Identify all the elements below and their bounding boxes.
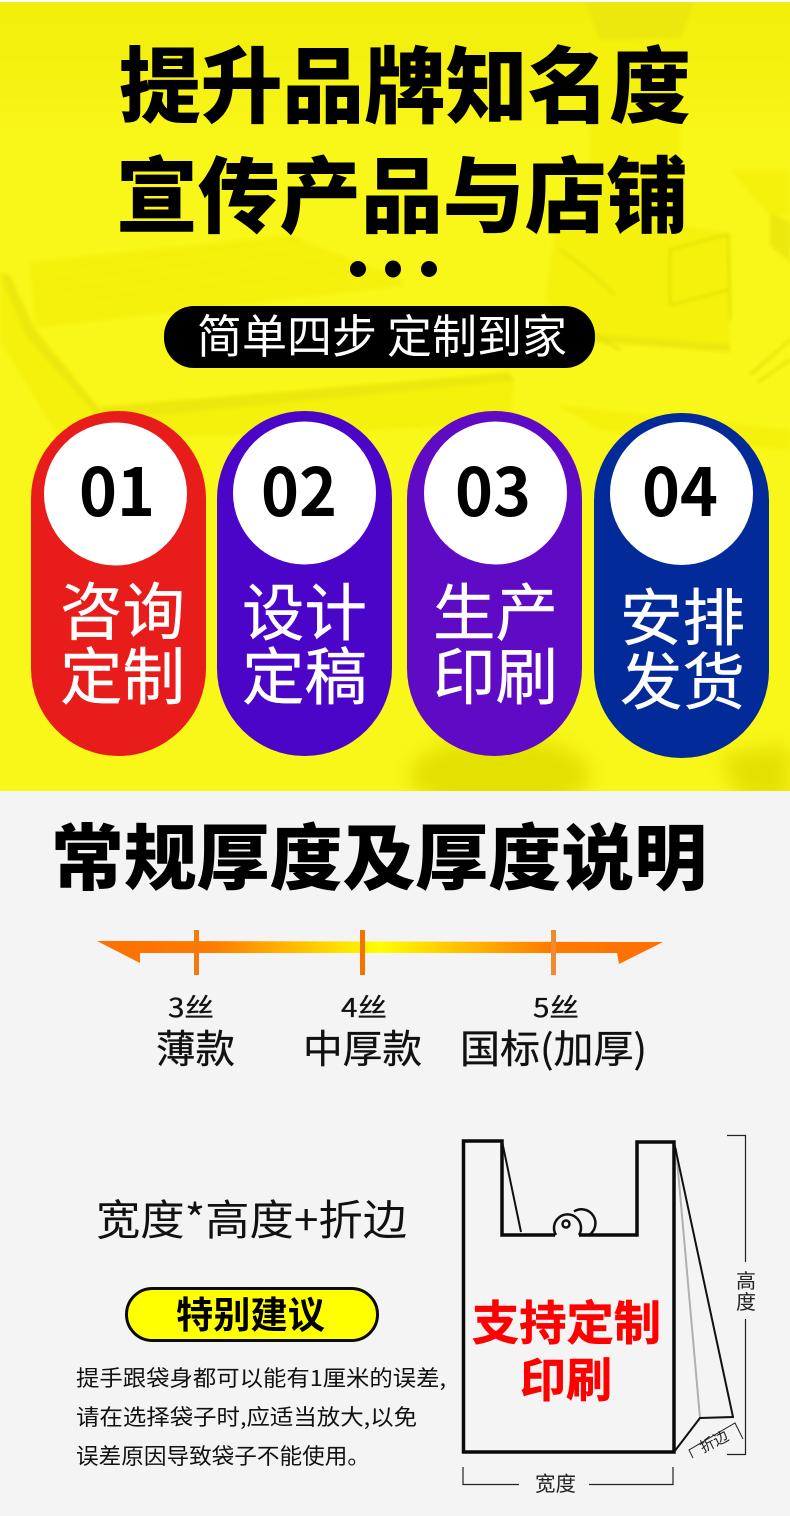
bag hole <box>554 1209 595 1235</box>
step 04 capsule <box>594 413 769 758</box>
thickness label: 5 si national standard: 5丝 <box>533 988 579 1025</box>
title: main heading <box>116 20 691 250</box>
fold label: 折边 <box>696 1425 732 1457</box>
panel: yellow hero background <box>0 0 790 813</box>
fold bracket <box>689 1423 743 1458</box>
bag print label: 印刷 <box>520 1342 612 1411</box>
thickness label: 4 si medium: 4丝 <box>341 988 387 1025</box>
title: main heading: 宣传产品与店铺 <box>116 130 688 250</box>
advice paragraph: 误差原因导致袋子不能使用。 <box>76 1439 370 1471</box>
width bracket <box>463 1467 673 1484</box>
diagram: t-shirt bag <box>463 1136 746 1484</box>
step 03 capsule: 生产 <box>433 563 558 653</box>
step 01 capsule: 咨询 <box>60 562 185 652</box>
bag print label: 支持定制 <box>472 1285 661 1354</box>
side fold <box>674 1142 733 1452</box>
size formula text: 宽度*高度+折边 <box>96 1187 407 1248</box>
thickness label: 3 si thin <box>156 988 235 1075</box>
decorative three dots <box>350 260 437 278</box>
advice paragraph: 提手跟袋身都可以能有1厘米的误差, <box>76 1361 446 1393</box>
thickness label: 5 si national standard <box>460 988 647 1075</box>
height bracket <box>727 1136 746 1454</box>
width label: 宽度 <box>535 1467 576 1497</box>
step 04 capsule: 发货 <box>620 632 745 722</box>
step 01 capsule <box>31 411 206 756</box>
step 03 capsule: 03 <box>455 440 531 536</box>
bag print label <box>472 1285 661 1411</box>
step 04 capsule: 04 <box>642 440 718 536</box>
thickness gradient scale <box>97 930 663 975</box>
thickness label: 3 si thin: 薄款 <box>156 1019 235 1075</box>
step 03 capsule: 印刷 <box>433 627 558 717</box>
title: main heading: 提升品牌知名度 <box>119 20 691 140</box>
handle gusset line <box>502 1141 521 1232</box>
subtitle pill: 简单四步 定制到家 <box>197 301 567 367</box>
height label <box>736 1265 756 1315</box>
bag outline <box>464 1141 674 1452</box>
callout: special advice pill: 特别建议 <box>176 1285 325 1339</box>
step 03 capsule <box>407 411 582 756</box>
advice paragraph: 请在选择袋子时,应适当放大,以免 <box>76 1400 417 1432</box>
step 01 capsule: 01 <box>79 440 155 536</box>
step 01 capsule: 定制 <box>60 627 185 717</box>
height label: 度 <box>736 1286 756 1315</box>
thickness label: 4 si medium: 中厚款 <box>303 1019 422 1075</box>
callout: special advice pill <box>126 1285 378 1340</box>
thickness label: 3 si thin: 3丝 <box>168 988 214 1025</box>
thickness label: 4 si medium <box>303 988 422 1075</box>
height label: 高 <box>736 1265 756 1294</box>
step 04 capsule: 安排 <box>620 568 745 658</box>
step 02 capsule <box>217 411 392 756</box>
section heading: thickness: 常规厚度及厚度说明 <box>51 800 707 905</box>
step 02 capsule: 定稿 <box>242 627 367 717</box>
step 02 capsule: 设计 <box>242 563 367 653</box>
advice paragraph <box>76 1361 446 1471</box>
thickness label: 5 si national standard: 国标(加厚) <box>460 1019 647 1075</box>
step 02 capsule: 02 <box>261 440 337 536</box>
